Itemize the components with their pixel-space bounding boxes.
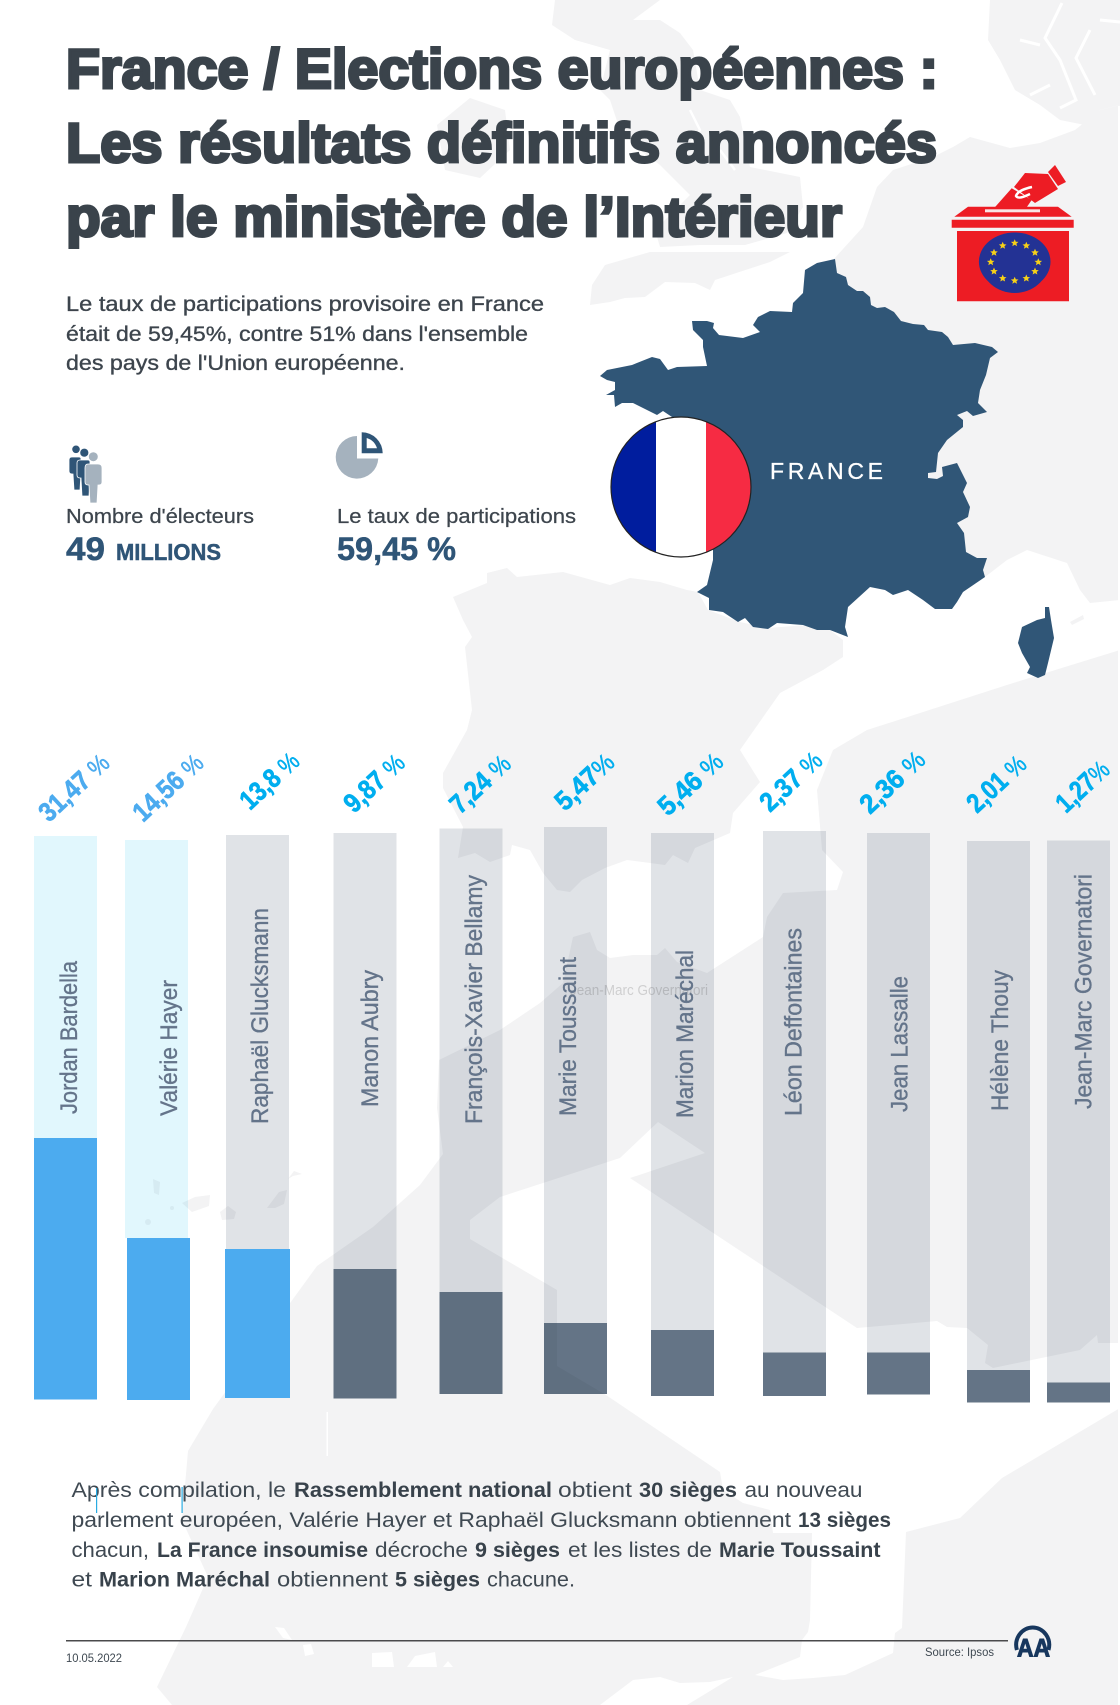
label: Nombre d'électeurs [66, 505, 254, 528]
bar: François-Xavier Bellamy: François-Xavier Bellamy [461, 875, 488, 1124]
intro paragraph: Le taux de participations provisoire en France [66, 293, 544, 316]
value: 59,45 % [337, 531, 456, 567]
bar: Jean-Marc Governatori [1047, 754, 1115, 1402]
summary text block: La France insoumise [157, 1538, 368, 1562]
bar: Valérie Hayer [125, 747, 209, 1400]
intro paragraph: était de 59,45%, contre 51% dans l'ensemble [66, 323, 528, 346]
bar: Valérie Hayer: Valérie Hayer [156, 980, 183, 1116]
icon: ballot box with EU flag [952, 165, 1074, 301]
summary text block: Marion Maréchal [99, 1568, 270, 1592]
summary text block: chacun, [72, 1538, 149, 1562]
bar: François-Xavier Bellamy: 7,24 % [444, 748, 517, 819]
summary text block [72, 1478, 891, 1592]
ghost label: Jean-Marc Governatori: Jean-Marc Governatori [570, 983, 708, 999]
summary text block: chacune. [487, 1568, 575, 1592]
summary text block: 13 sièges [798, 1508, 891, 1532]
bar: Léon Deffontaines [754, 745, 828, 1396]
bar: Valérie Hayer: 14,56 % [127, 747, 209, 827]
bar: Jean Lassalle: 2,36 % [854, 744, 931, 819]
bar: Manon Aubry: Manon Aubry [357, 970, 384, 1107]
icon: pie chart [336, 432, 383, 479]
logo: Anadolu Agency: AA [1017, 1634, 1050, 1662]
bar: Hélène Thouy: 2,01 % [961, 749, 1032, 818]
bar: Marion Maréchal: 5,46 % [652, 746, 729, 821]
bar: Léon Deffontaines: Léon Deffontaines [780, 928, 808, 1116]
source: Source: Ipsos [925, 1647, 994, 1659]
bar: Raphaël Glucksmann [225, 746, 305, 1398]
bar chart: candidates [33, 744, 1115, 1402]
summary text block: 9 sièges [475, 1538, 560, 1562]
bar: Jordan Bardella: Jordan Bardella [56, 960, 83, 1114]
Corsica [1018, 607, 1054, 678]
bar: Marie Toussaint: 5,47% [549, 747, 620, 816]
bar: Jean-Marc Governatori: Jean-Marc Governatori [1070, 874, 1098, 1109]
bar: Raphaël Glucksmann: 13,8 % [234, 746, 305, 815]
bar: Jordan Bardella: 31,47 % [33, 747, 115, 827]
title: par le ministère de l’Intérieur [66, 185, 842, 248]
EU flag [979, 233, 1050, 293]
map of France [600, 259, 1054, 678]
stat: number of voters [66, 445, 254, 567]
summary text block: Après compilation, le [72, 1478, 286, 1502]
bar: Hélène Thouy: Hélène Thouy [987, 970, 1014, 1111]
bar: Marie Toussaint: Marie Toussaint [555, 957, 582, 1116]
label: Le taux de participations [337, 505, 576, 528]
summary text block: 5 sièges [395, 1568, 480, 1592]
bar: Marion Maréchal: Marion Maréchal [672, 950, 699, 1118]
bar: Hélène Thouy [961, 749, 1032, 1402]
icon: French flag circle [611, 417, 752, 557]
bar: Marion Maréchal [651, 746, 729, 1396]
intro paragraph [66, 293, 544, 375]
stat: turnout [336, 432, 576, 567]
sea cut-outs in the background map [275, 3, 1120, 1705]
summary text block: obtiennent [277, 1568, 388, 1592]
footer rule [66, 1640, 1008, 1642]
bar: Manon Aubry [334, 747, 411, 1398]
summary text block: Rassemblement national [294, 1478, 552, 1502]
bar: François-Xavier Bellamy [440, 748, 517, 1394]
icon: queue of voters [69, 445, 102, 503]
date: 10.05.2022 [66, 1653, 122, 1665]
intro paragraph: des pays de l'Union européenne. [66, 352, 405, 375]
bar: Raphaël Glucksmann: Raphaël Glucksmann [247, 908, 274, 1124]
bar: Marie Toussaint [544, 747, 620, 1394]
value: MILLIONS [116, 539, 221, 565]
bar: Manon Aubry: 9,87 % [338, 747, 411, 818]
summary text block: et les listes de [568, 1538, 712, 1562]
bar: Jean-Marc Governatori: 1,27% [1050, 754, 1115, 818]
summary text block: 30 sièges [639, 1478, 737, 1502]
bar: Jordan Bardella [33, 747, 115, 1400]
title: Les résultats définitifs annoncés [66, 111, 937, 174]
summary text block: parlement européen, Valérie Hayer et Raphaël Glucksmann obtiennent [72, 1508, 791, 1532]
label: FRANCE: FRANCE [770, 458, 883, 484]
title [66, 37, 938, 248]
summary text block: et [72, 1568, 92, 1592]
bar: Léon Deffontaines: 2,37 % [754, 745, 828, 817]
summary text block: Marie Toussaint [719, 1538, 880, 1562]
bar: Jean Lassalle: Jean Lassalle [886, 976, 914, 1112]
summary text block: au nouveau [744, 1478, 862, 1502]
title: France / Elections européennes : [66, 37, 938, 100]
value: 49 [66, 531, 105, 567]
bar: Jean Lassalle [854, 744, 931, 1394]
summary text block: obtient [558, 1478, 632, 1502]
summary text block: décroche [375, 1538, 468, 1562]
